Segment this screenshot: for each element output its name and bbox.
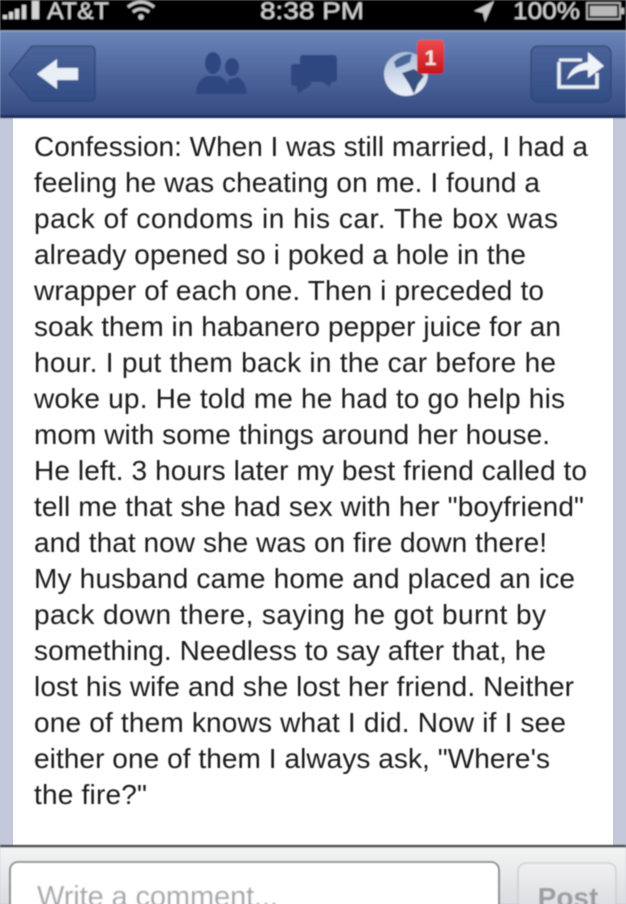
post text: hour. I put them back in the car before he: [34, 347, 556, 378]
status bar: [0, 0, 626, 31]
post text: mom with some things around her house.: [34, 419, 550, 450]
icon: back arrow: [37, 59, 78, 89]
icon: globe notifications: [384, 40, 444, 96]
post text: soak them in habanero pepper juice for an: [34, 311, 561, 342]
icon: battery: [587, 3, 624, 19]
navigation bar: [0, 30, 626, 118]
post text: pack of condoms in his car. The box was: [34, 203, 558, 234]
notification badge: 1: [425, 47, 437, 70]
post text: [33, 131, 588, 810]
post text: lost his wife and she lost her friend. Neither: [34, 671, 574, 702]
post text: tell me that she had sex with her "boyfriend": [34, 491, 584, 522]
share button: [531, 46, 611, 102]
post text: pack down there, saying he got burnt by: [34, 599, 546, 630]
post text: already opened so i poked a hole in the: [34, 239, 526, 270]
post text: My husband came home and placed an ice: [34, 563, 575, 594]
icon: friends: [196, 52, 247, 94]
post text: one of them knows what I did. Now if I see: [34, 707, 566, 738]
post text: feeling he was cheating on me. I found a: [34, 167, 540, 198]
post text: Confession: When I was still married, I had a: [34, 131, 588, 162]
comment bar: [0, 845, 626, 904]
icon: share arrow: [559, 52, 604, 87]
back button: [9, 46, 95, 101]
post text: either one of them I always ask, "Where's: [34, 743, 550, 774]
post text: and that now she was on fire down there!: [34, 527, 547, 558]
post text: the fire?": [34, 779, 147, 810]
post button: [518, 863, 616, 904]
post text: He left. 3 hours later my best friend called to: [34, 455, 587, 486]
icon: wifi: [128, 2, 154, 18]
icon: messages: [291, 55, 337, 94]
post text: wrapper of each one. Then i preceded to: [33, 275, 544, 306]
post text: something. Needless to say after that, he: [34, 635, 546, 666]
post text: woke up. He told me he had to go help his: [33, 383, 565, 414]
icon: signal bars: [3, 1, 39, 19]
comment input: [10, 862, 499, 904]
icon: location arrow: [474, 1, 494, 22]
